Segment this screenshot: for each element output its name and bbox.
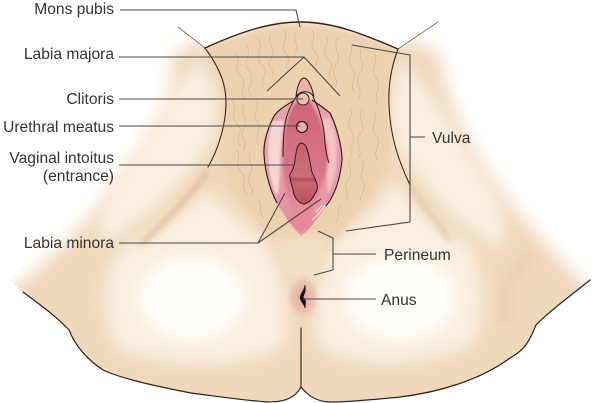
- label: urethral meatus: Urethral meatus: [3, 119, 114, 136]
- mons upper edge mask: [185, 18, 422, 48]
- label: labia minora: Labia minora: [24, 235, 114, 252]
- hip shading right: [503, 257, 530, 325]
- perineum shading: [274, 234, 329, 276]
- leader lines: [119, 10, 425, 299]
- thigh crease left: [140, 170, 208, 245]
- label: perineum: Perineum: [384, 247, 451, 264]
- label: mons pubis: Mons pubis: [34, 1, 114, 18]
- inner fold lines: [283, 97, 296, 157]
- leader: anus: [303, 298, 376, 300]
- label: clitoris: Clitoris: [66, 91, 114, 108]
- vestibule: [283, 98, 328, 226]
- leader: labia minora: [119, 193, 321, 243]
- outline: left groin: [205, 48, 226, 167]
- outline: gluteal cleft: [300, 328, 302, 387]
- lower pink glow: [287, 216, 318, 236]
- outline: left groin upper: [178, 27, 205, 48]
- thigh crease right: [410, 185, 450, 240]
- clitoral hood: [296, 78, 314, 97]
- labial highlights: [312, 205, 325, 220]
- labia outer edge: [264, 101, 293, 203]
- leader: vaginal introitus: [119, 164, 294, 166]
- bracket: perineum: [314, 231, 376, 275]
- urethral meatus: [296, 122, 308, 132]
- label: labia majora: Labia majora: [24, 46, 114, 63]
- label: vaginal introitus: Vaginal intoitus: [9, 150, 114, 167]
- highlight: left inner thigh: [98, 60, 218, 245]
- label: anus: Anus: [381, 292, 417, 309]
- light inner fold left: [268, 120, 284, 195]
- light inner fold right: [322, 118, 337, 195]
- anus: [285, 271, 321, 323]
- leader: mons pubis: [120, 10, 300, 27]
- outline: lower body right: [301, 280, 590, 402]
- highlight: right buttock centre: [344, 256, 456, 340]
- highlight: right inner thigh: [390, 60, 505, 250]
- outline: right groin upper: [398, 22, 438, 49]
- hair texture: [232, 30, 378, 223]
- clitoris: [297, 93, 309, 105]
- label: entrance: (entrance): [43, 168, 114, 185]
- vaginal introitus: [290, 143, 317, 204]
- highlight: left buttock centre: [140, 256, 244, 340]
- anal pigmentation: [285, 271, 321, 323]
- outline: lower body left: [23, 292, 301, 402]
- highlight: right buttock pale area: [314, 178, 483, 364]
- central mons and labia majora region: [205, 22, 398, 262]
- outline: mons top: [205, 22, 398, 49]
- leader: urethral meatus: [119, 125, 300, 127]
- highlight: left buttock pale area: [104, 190, 287, 364]
- label: vulva: Vulva: [432, 130, 471, 147]
- labia minora: [264, 97, 342, 236]
- bracket: vulva: [346, 45, 425, 231]
- leader: labia majora: [119, 57, 340, 96]
- anal opening: [300, 285, 306, 308]
- outline: right groin: [389, 49, 410, 185]
- vulva: [264, 78, 342, 236]
- leader: clitoris: [119, 98, 303, 100]
- labels: [3, 1, 471, 309]
